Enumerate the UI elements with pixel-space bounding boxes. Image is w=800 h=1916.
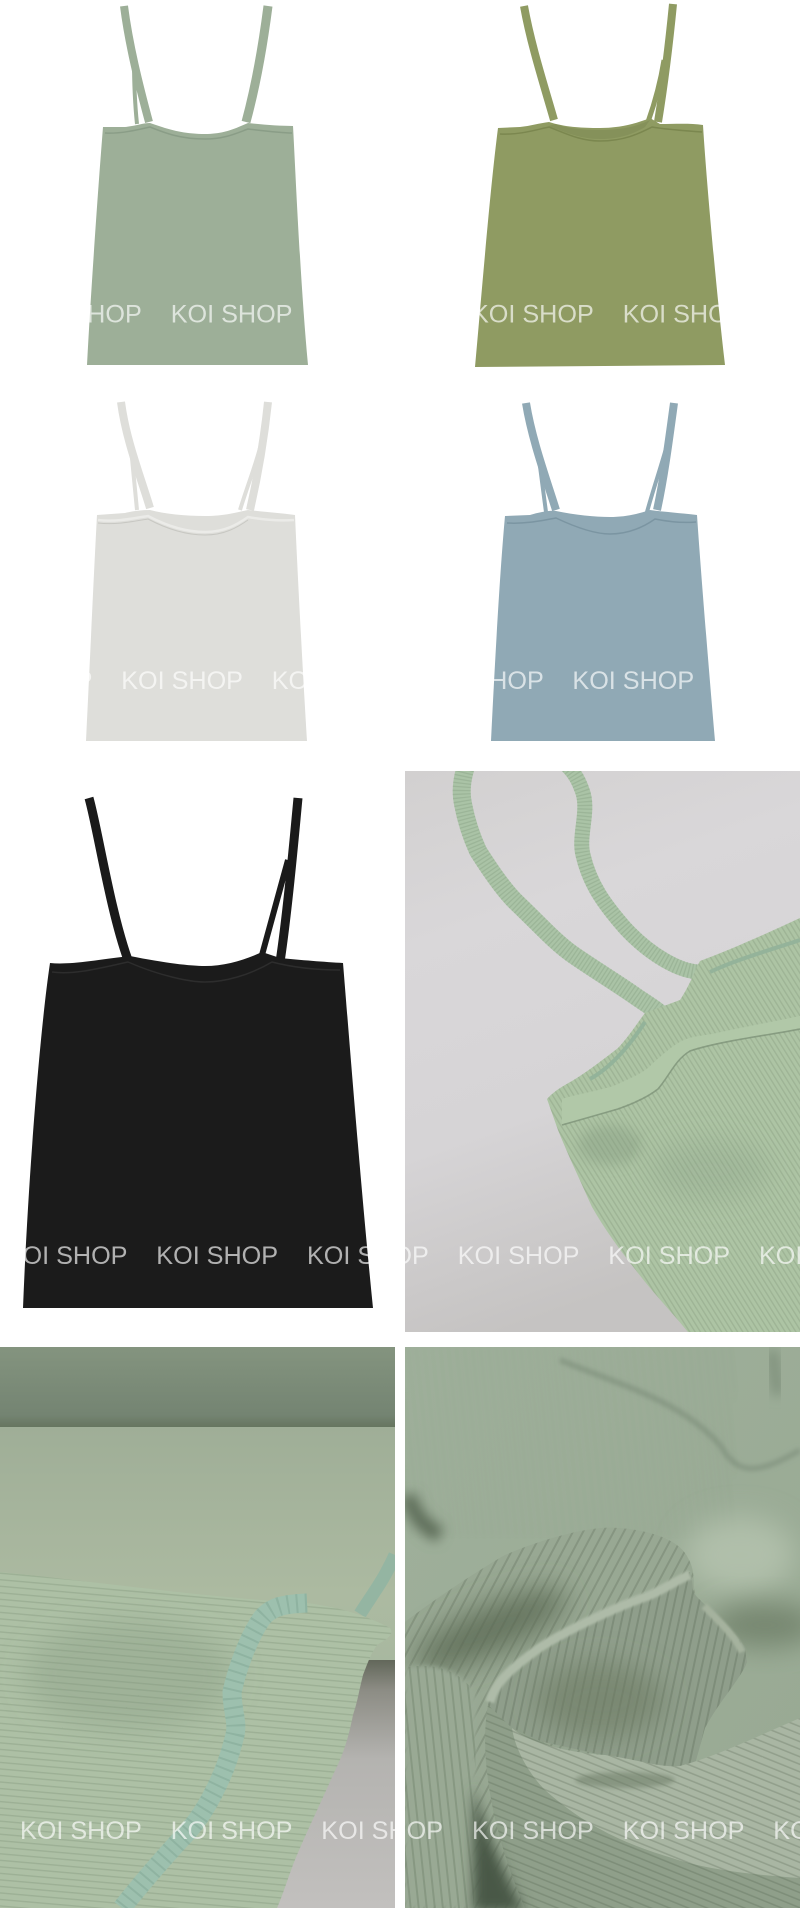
watermark row 3: KOI SHOP <box>156 1242 278 1270</box>
watermark row 3 <box>6 1242 800 1270</box>
grey table background <box>277 1660 395 1908</box>
photo: dusty blue camisole <box>491 403 715 741</box>
bottom fold <box>485 1705 800 1908</box>
watermark row 1: KOI SHOP <box>321 301 443 329</box>
watermark row 3: KOI SHOP <box>608 1242 730 1270</box>
watermark row 4: KOI SHOP <box>623 1817 744 1845</box>
watermark row 2 <box>0 667 800 695</box>
watermark row 4 <box>20 1817 800 1845</box>
watermark row 1: KOI SHOP <box>171 301 292 329</box>
watermark row 3: KOI SHOP <box>458 1242 579 1270</box>
left ribbed fabric <box>405 1666 476 1908</box>
watermark row 3: KOI SHOP <box>307 1242 429 1270</box>
watermark row 2: KOI SHOP <box>121 667 243 695</box>
garment body <box>547 918 800 1332</box>
ribbed front fabric <box>0 1572 391 1908</box>
watermark row 4: KOI SHOP <box>472 1817 594 1845</box>
watermark row 1: KOI SHOP <box>472 301 594 329</box>
back seam <box>360 1555 395 1614</box>
watermark row 4: KOI SHOP <box>20 1817 142 1845</box>
blurred background seam and folds <box>405 1347 800 1647</box>
photo: strap detail close-up <box>405 755 800 1332</box>
watermark row 2: KOI SHOP <box>272 667 393 695</box>
watermark row 4: KOI SHOP <box>321 1817 443 1845</box>
lower roll <box>512 1718 800 1878</box>
photo: sage green camisole <box>87 6 308 365</box>
inner pocket of the fold <box>488 1572 747 1775</box>
photo: hem stitching close-up <box>0 1347 395 1908</box>
photo: black camisole <box>23 798 373 1308</box>
photo: white camisole <box>86 402 307 741</box>
neckline band <box>562 940 800 1125</box>
dark shadow <box>473 1785 525 1912</box>
teal overlock stitch <box>122 1603 307 1908</box>
watermark row 2: KOI SHOP <box>422 667 544 695</box>
watermark row 2: KOI SHOP <box>572 667 694 695</box>
watermark row 1: KOI SHOP <box>623 301 744 329</box>
watermark row 3: KOI SHOP <box>6 1242 127 1270</box>
watermark row 4: KOI SHOP <box>171 1817 292 1845</box>
watermark row 1 <box>20 301 800 329</box>
blurred back fabric <box>0 1347 395 1667</box>
photo: rib fabric fold close-up <box>403 1347 800 1912</box>
watermark row 1: KOI SHOP <box>20 301 142 329</box>
upper outer fold <box>405 1528 695 1908</box>
photo: olive green camisole <box>475 4 725 367</box>
strap loop <box>452 771 698 1014</box>
